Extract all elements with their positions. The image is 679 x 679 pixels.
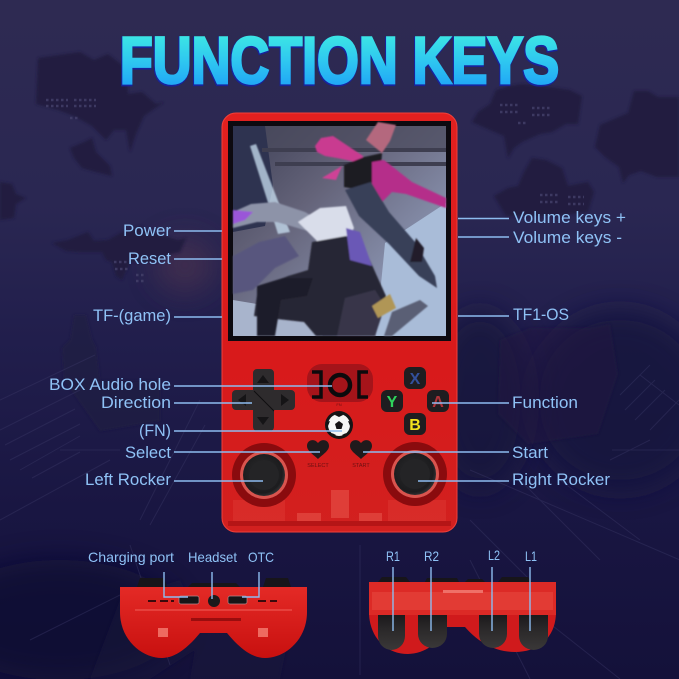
select button: [307, 440, 329, 469]
top view labels: R2: [424, 548, 439, 564]
right labels: Volume keys -: [513, 228, 622, 247]
bottom view of console: [120, 578, 307, 658]
bottom view callouts: [164, 572, 259, 599]
top view labels: [386, 547, 537, 564]
left labels: Select: [125, 443, 171, 462]
shoulder buttons: [378, 615, 548, 650]
face button Y: [381, 390, 403, 412]
title: FUNCTION KEYS: [119, 25, 559, 98]
callout lines: front: [174, 218, 509, 481]
game screen artwork: [233, 122, 446, 336]
white haired fighter: [233, 202, 319, 232]
left labels: Direction: [101, 393, 171, 412]
left rocker: [232, 443, 296, 507]
left labels: [49, 221, 171, 489]
face button A: A: [432, 394, 444, 411]
select button: SELECT: [307, 463, 329, 469]
top view of console: [369, 577, 556, 654]
left labels: Power: [123, 221, 171, 240]
screen bezel: [228, 121, 451, 341]
bottom view labels: OTC: [248, 549, 274, 565]
left labels: BOX Audio hole: [49, 375, 171, 394]
top view callouts: [393, 567, 530, 631]
top view labels: L2: [488, 547, 500, 563]
right labels: Start: [512, 443, 548, 462]
right labels: Volume keys +: [513, 208, 626, 227]
bottom view labels: Headset: [188, 549, 237, 565]
top view labels: L1: [525, 548, 537, 564]
face button X: [404, 367, 426, 389]
face button B: B: [409, 417, 421, 434]
body lower translucent detail: [228, 490, 451, 526]
left labels: Reset: [128, 249, 171, 268]
d-pad: [232, 369, 295, 431]
top edge buttons: [137, 578, 291, 587]
right labels: Function: [512, 393, 578, 412]
FN soccer ball button: FN: [336, 402, 342, 407]
start button: START: [352, 463, 370, 469]
shell: [369, 582, 556, 654]
left labels: Left Rocker: [85, 470, 171, 489]
left labels: TF-(game): [93, 306, 171, 325]
FN soccer ball button: [325, 402, 353, 439]
right labels: [512, 208, 626, 489]
ports: [148, 595, 277, 607]
top view labels: R1: [386, 548, 400, 564]
face button Y: Y: [387, 394, 398, 411]
shell: [120, 587, 307, 658]
pink fighter: [315, 136, 363, 163]
bottom view labels: [88, 549, 274, 565]
title: FUNCTION KEYS: [120, 24, 559, 97]
face button B: [404, 413, 426, 435]
right rocker: [383, 442, 447, 506]
face button X: X: [410, 371, 421, 388]
console body: [222, 113, 457, 532]
bottom view labels: Charging port: [88, 549, 174, 565]
speaker panel: BOX audio hole: [307, 364, 373, 402]
right labels: Right Rocker: [512, 470, 610, 489]
start button: [350, 440, 372, 469]
right labels: TF1-OS: [513, 305, 569, 324]
face button A: [427, 390, 449, 412]
top edge controls: [378, 577, 532, 582]
main handheld console: [222, 113, 457, 532]
left labels: (FN): [139, 421, 171, 440]
